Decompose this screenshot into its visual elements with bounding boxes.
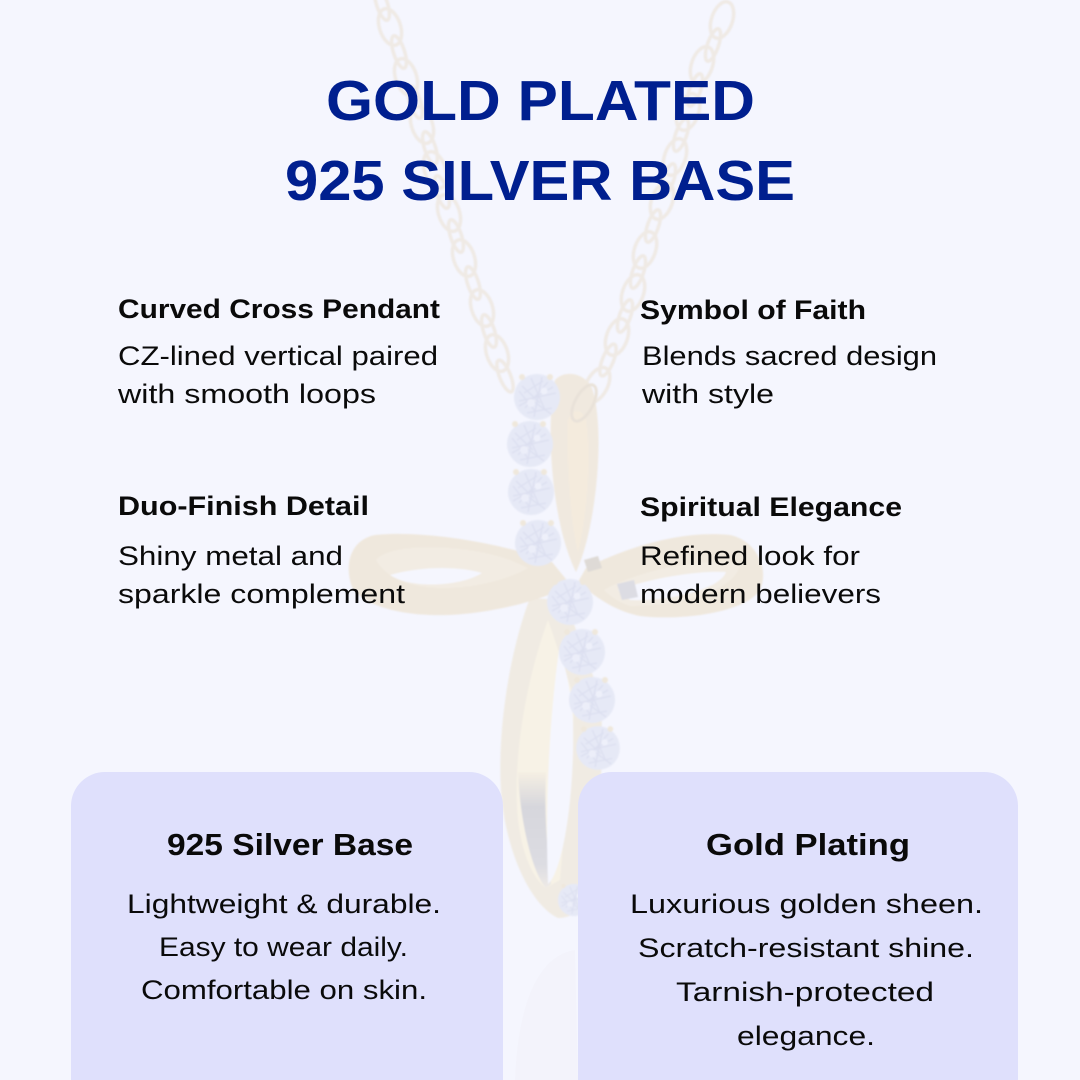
panel: 925 Silver Base: Easy to wear daily. — [159, 932, 408, 962]
panel: 925 Silver Base: Lightweight & durable. — [127, 889, 441, 919]
feature: Spiritual Elegance: Spiritual Elegance — [640, 492, 902, 522]
panel: Gold Plating: Tarnish-protected — [676, 977, 934, 1007]
pendant: right loop — [578, 534, 763, 617]
feature: Duo-Finish Detail: Shiny metal and — [118, 541, 343, 571]
feature: Symbol of Faith: Symbol of Faith — [640, 295, 866, 325]
panel: 925 Silver Base — [71, 772, 503, 1080]
title: GOLD PLATED — [326, 69, 755, 133]
pendant: bail ring — [567, 381, 601, 425]
pendant reflection — [515, 950, 578, 1080]
necklace chain: left — [372, 0, 516, 394]
feature: Curved Cross Pendant — [117, 294, 440, 409]
feature: Duo-Finish Detail: sparkle complement — [118, 579, 406, 609]
panel: Gold Plating: elegance. — [737, 1021, 875, 1051]
feature: Spiritual Elegance — [640, 492, 902, 609]
pendant: left loop — [349, 534, 570, 615]
feature: Curved Cross Pendant: Curved Cross Pendant — [118, 294, 440, 324]
title — [285, 69, 795, 213]
panel: Gold Plating: Luxurious golden sheen. — [630, 889, 983, 919]
panel: 925 Silver Base: 925 Silver Base — [167, 827, 413, 862]
pendant: bottom loop — [500, 598, 602, 918]
feature: Symbol of Faith: with style — [641, 379, 774, 409]
feature: Duo-Finish Detail: Duo-Finish Detail — [118, 491, 369, 521]
title: 925 SILVER BASE — [285, 149, 795, 213]
feature: Spiritual Elegance: Refined look for — [640, 541, 860, 571]
feature: Curved Cross Pendant: CZ-lined vertical paired — [118, 341, 438, 371]
panel: 925 Silver Base: Comfortable on skin. — [141, 975, 427, 1005]
necklace chain: right — [579, 0, 738, 407]
cross pendant — [349, 374, 763, 918]
feature: Curved Cross Pendant: with smooth loops — [117, 379, 376, 409]
feature: Symbol of Faith: Blends sacred design — [642, 341, 937, 371]
pendant: top loop — [551, 374, 599, 572]
feature: Spiritual Elegance: modern believers — [640, 579, 881, 609]
panel: Gold Plating — [578, 772, 1018, 1080]
panel: Gold Plating: Scratch-resistant shine. — [638, 933, 974, 963]
pendant: CZ stones — [507, 374, 620, 916]
feature: Symbol of Faith — [640, 295, 937, 409]
feature: Duo-Finish Detail — [118, 491, 406, 609]
panel: Gold Plating: Gold Plating — [706, 827, 910, 862]
